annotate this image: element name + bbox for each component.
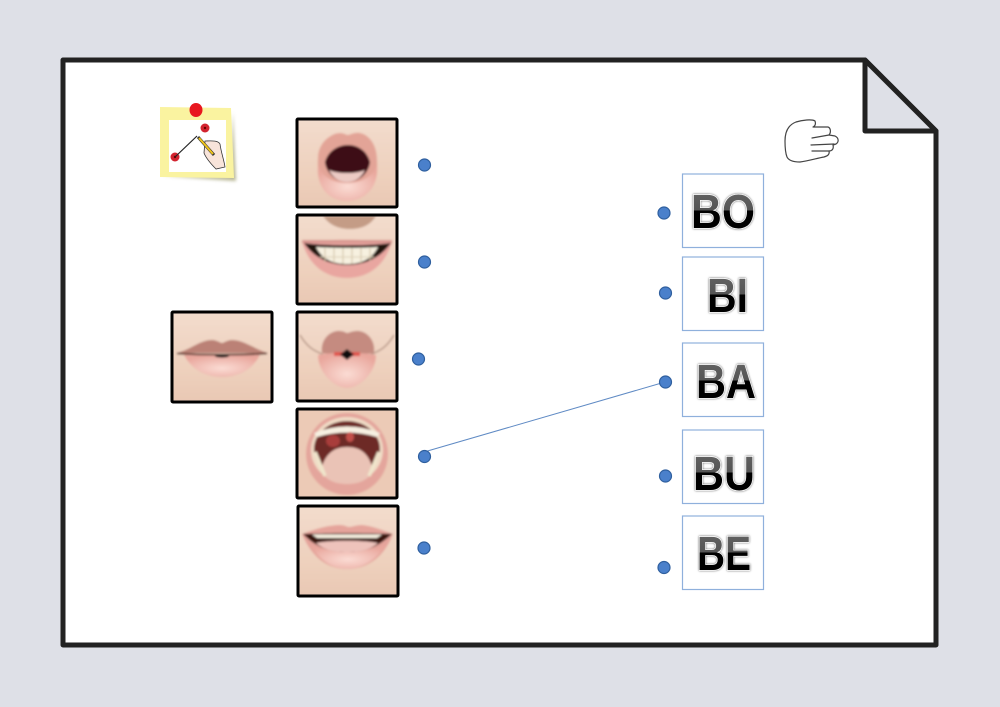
photo: wide smile with teeth (I) (297, 215, 397, 304)
right connector dots (658, 207, 672, 574)
syllable card: BA (682, 343, 764, 416)
connecting line: example answer (424, 382, 665, 452)
left connector dots (412, 159, 430, 554)
syllable card: BE: BE (697, 528, 751, 581)
icon: pointing hand (785, 120, 838, 162)
syllable card: BU (682, 430, 764, 504)
syllable card: BE (682, 516, 764, 590)
syllable card: BU: BU (693, 448, 755, 501)
syllable card: BI: BI (707, 270, 748, 323)
syllable card: BA: BA (696, 356, 756, 409)
photo: wide open mouth (A) (297, 409, 397, 498)
icon: sticky note with matching activity pictogram (160, 103, 236, 181)
photo: closed lips (start position) (172, 312, 272, 402)
paper sheet with folded corner (63, 60, 936, 645)
syllable card: BI (682, 257, 764, 330)
syllable card: BO: BO (691, 186, 755, 239)
syllable card: BO (682, 174, 764, 248)
photo: puckered lips (U) (297, 312, 397, 401)
photo: rounded open mouth (O) (297, 119, 397, 207)
photo: slightly open smile (E) (298, 506, 398, 596)
